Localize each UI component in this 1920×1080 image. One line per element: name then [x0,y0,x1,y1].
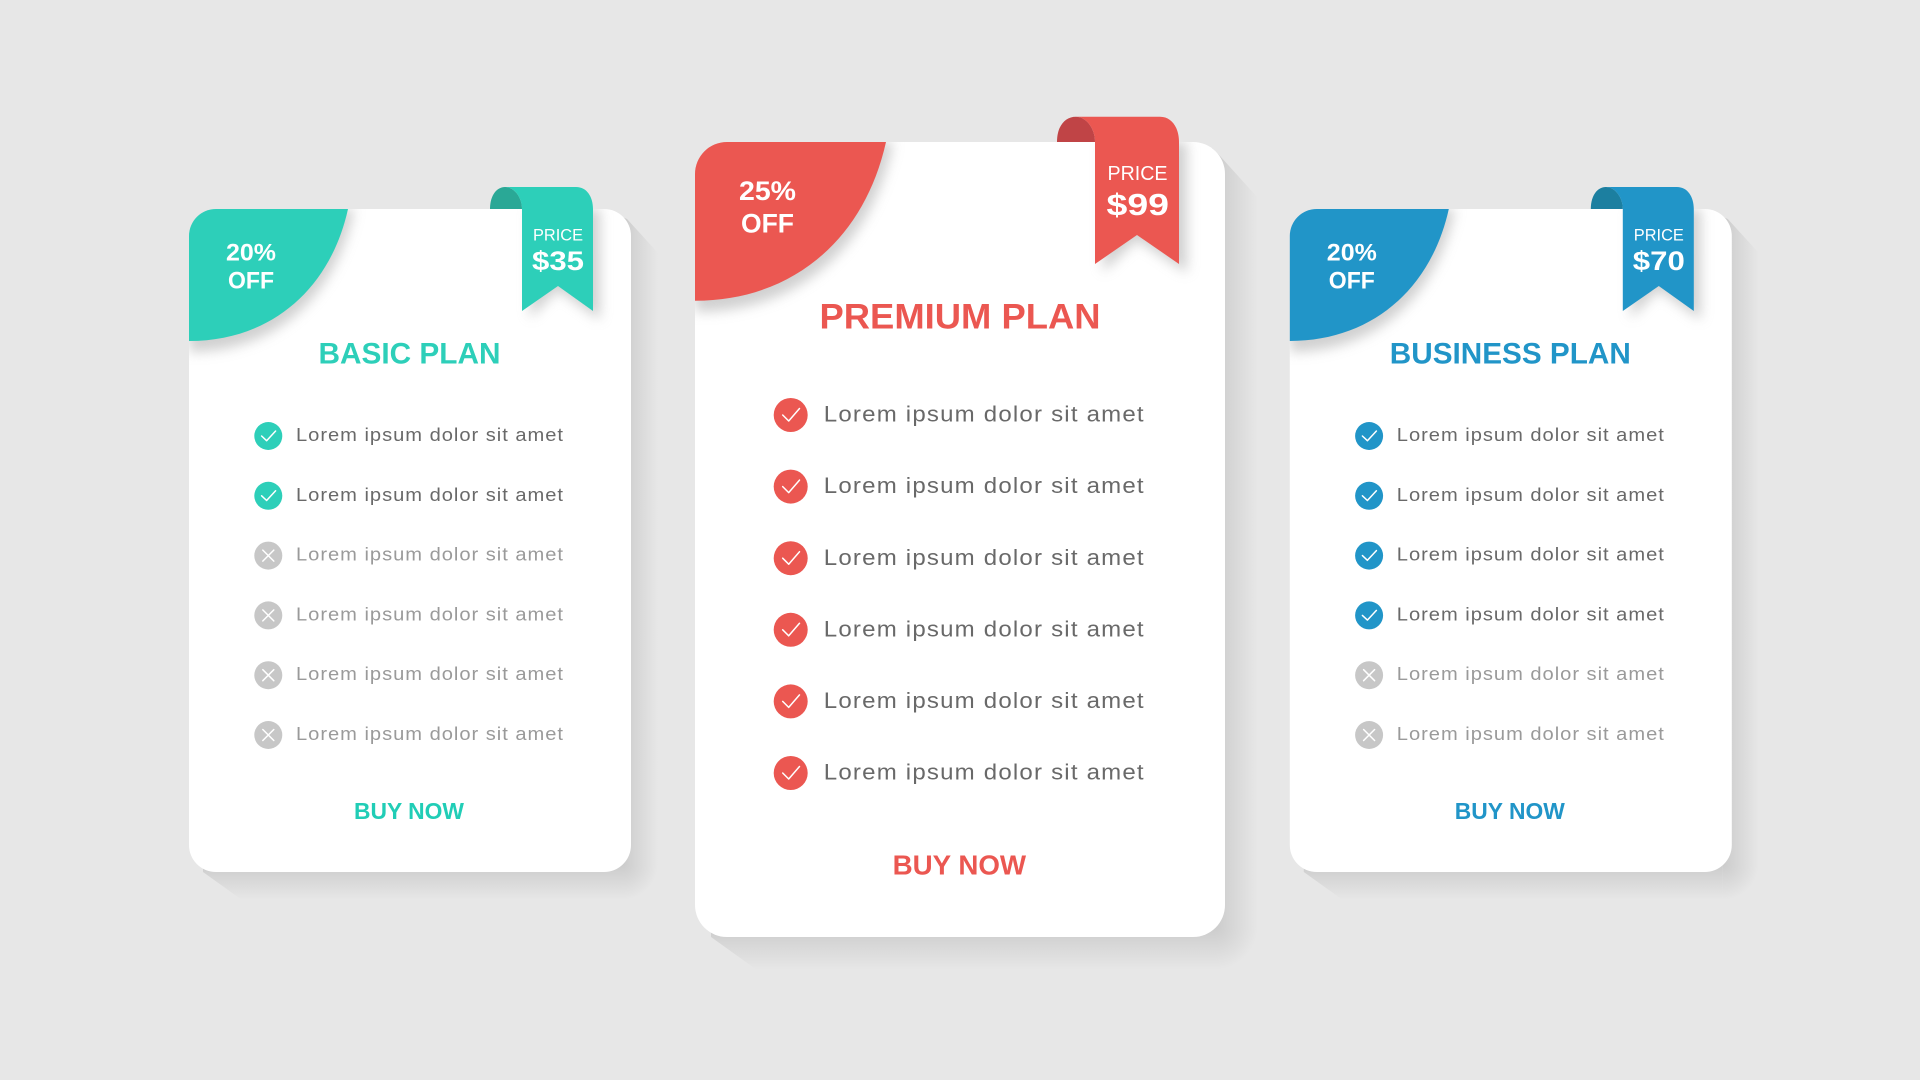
inner shadows [189,209,600,352]
feature 2 [774,470,1145,504]
card shadow [203,216,658,900]
feature 4 [1355,601,1665,629]
price text [532,226,584,276]
discount text [739,176,796,239]
card body [1290,209,1732,872]
plan title: BASIC PLAN [318,338,500,371]
feature 2: Lorem ipsum dolor sit amet [824,473,1145,498]
discount text [1327,240,1377,295]
price ribbon [505,187,593,311]
feature 5: Lorem ipsum dolor sit amet [296,663,564,684]
ribbon fold [1057,117,1095,142]
feature 4: Lorem ipsum dolor sit amet [824,617,1145,642]
price text [1633,226,1685,276]
discount text: OFF [1329,268,1375,295]
feature 4 [774,613,1145,647]
discount text: 20% [1327,240,1377,266]
feature list [254,422,564,749]
plan title: PREMIUM PLAN [820,298,1100,336]
card shadow [1304,216,1759,900]
discount text: OFF [741,209,794,239]
feature list [774,398,1145,790]
ribbon fold [1591,187,1623,209]
feature 1 [774,398,1145,432]
feature list [1355,422,1665,749]
feature 6: Lorem ipsum dolor sit amet [296,723,564,744]
panel: business plan [1290,187,1759,900]
card body [695,142,1225,937]
buy now: BUY NOW [893,850,1026,880]
buy now: BUY NOW [354,798,464,824]
feature 4: Lorem ipsum dolor sit amet [296,603,564,624]
feature 5: Lorem ipsum dolor sit amet [1397,663,1665,684]
feature 2: Lorem ipsum dolor sit amet [296,484,564,505]
feature 2: Lorem ipsum dolor sit amet [1397,484,1665,505]
feature 6 [774,756,1145,790]
price text: PRICE [1634,226,1684,245]
price text: $70 [1633,246,1685,276]
discount corner [695,142,886,301]
panel: basic plan [189,187,658,900]
card shadow [711,148,1258,970]
feature 6 [254,721,564,749]
feature 4 [254,601,564,629]
price ribbon [1076,117,1179,264]
feature 1: Lorem ipsum dolor sit amet [1397,424,1665,445]
panel: premium plan [695,117,1258,970]
inner shadows [695,142,1187,312]
discount text: 25% [739,176,796,206]
feature 5 [774,684,1145,718]
feature 3 [774,541,1145,575]
feature 1: Lorem ipsum dolor sit amet [296,424,564,445]
price text [1106,163,1169,222]
inner shadows [1290,209,1701,352]
discount text: 20% [226,240,276,266]
feature 3: Lorem ipsum dolor sit amet [1397,544,1665,565]
card body [189,209,631,872]
feature 1 [254,422,564,450]
feature 3: Lorem ipsum dolor sit amet [296,544,564,565]
feature 6 [1355,721,1665,749]
price text: $35 [532,246,584,276]
feature 5 [254,661,564,689]
price text: PRICE [533,226,583,245]
feature 5: Lorem ipsum dolor sit amet [824,688,1145,713]
discount text [226,240,276,295]
discount text: OFF [228,268,274,295]
feature 3 [254,542,564,570]
price ribbon [1606,187,1694,311]
feature 3: Lorem ipsum dolor sit amet [824,545,1145,570]
discount corner [189,209,348,341]
feature 4: Lorem ipsum dolor sit amet [1397,603,1665,624]
feature 3 [1355,542,1665,570]
feature 6: Lorem ipsum dolor sit amet [824,760,1145,785]
feature 2 [1355,482,1665,510]
feature 2 [254,482,564,510]
price text: PRICE [1108,163,1168,185]
feature 1: Lorem ipsum dolor sit amet [824,402,1145,427]
buy now: BUY NOW [1455,798,1565,824]
price text: $99 [1106,187,1169,222]
feature 5 [1355,661,1665,689]
feature 6: Lorem ipsum dolor sit amet [1397,723,1665,744]
feature 1 [1355,422,1665,450]
discount corner [1290,209,1449,341]
ribbon fold [490,187,522,209]
plan title: BUSINESS PLAN [1390,338,1631,371]
